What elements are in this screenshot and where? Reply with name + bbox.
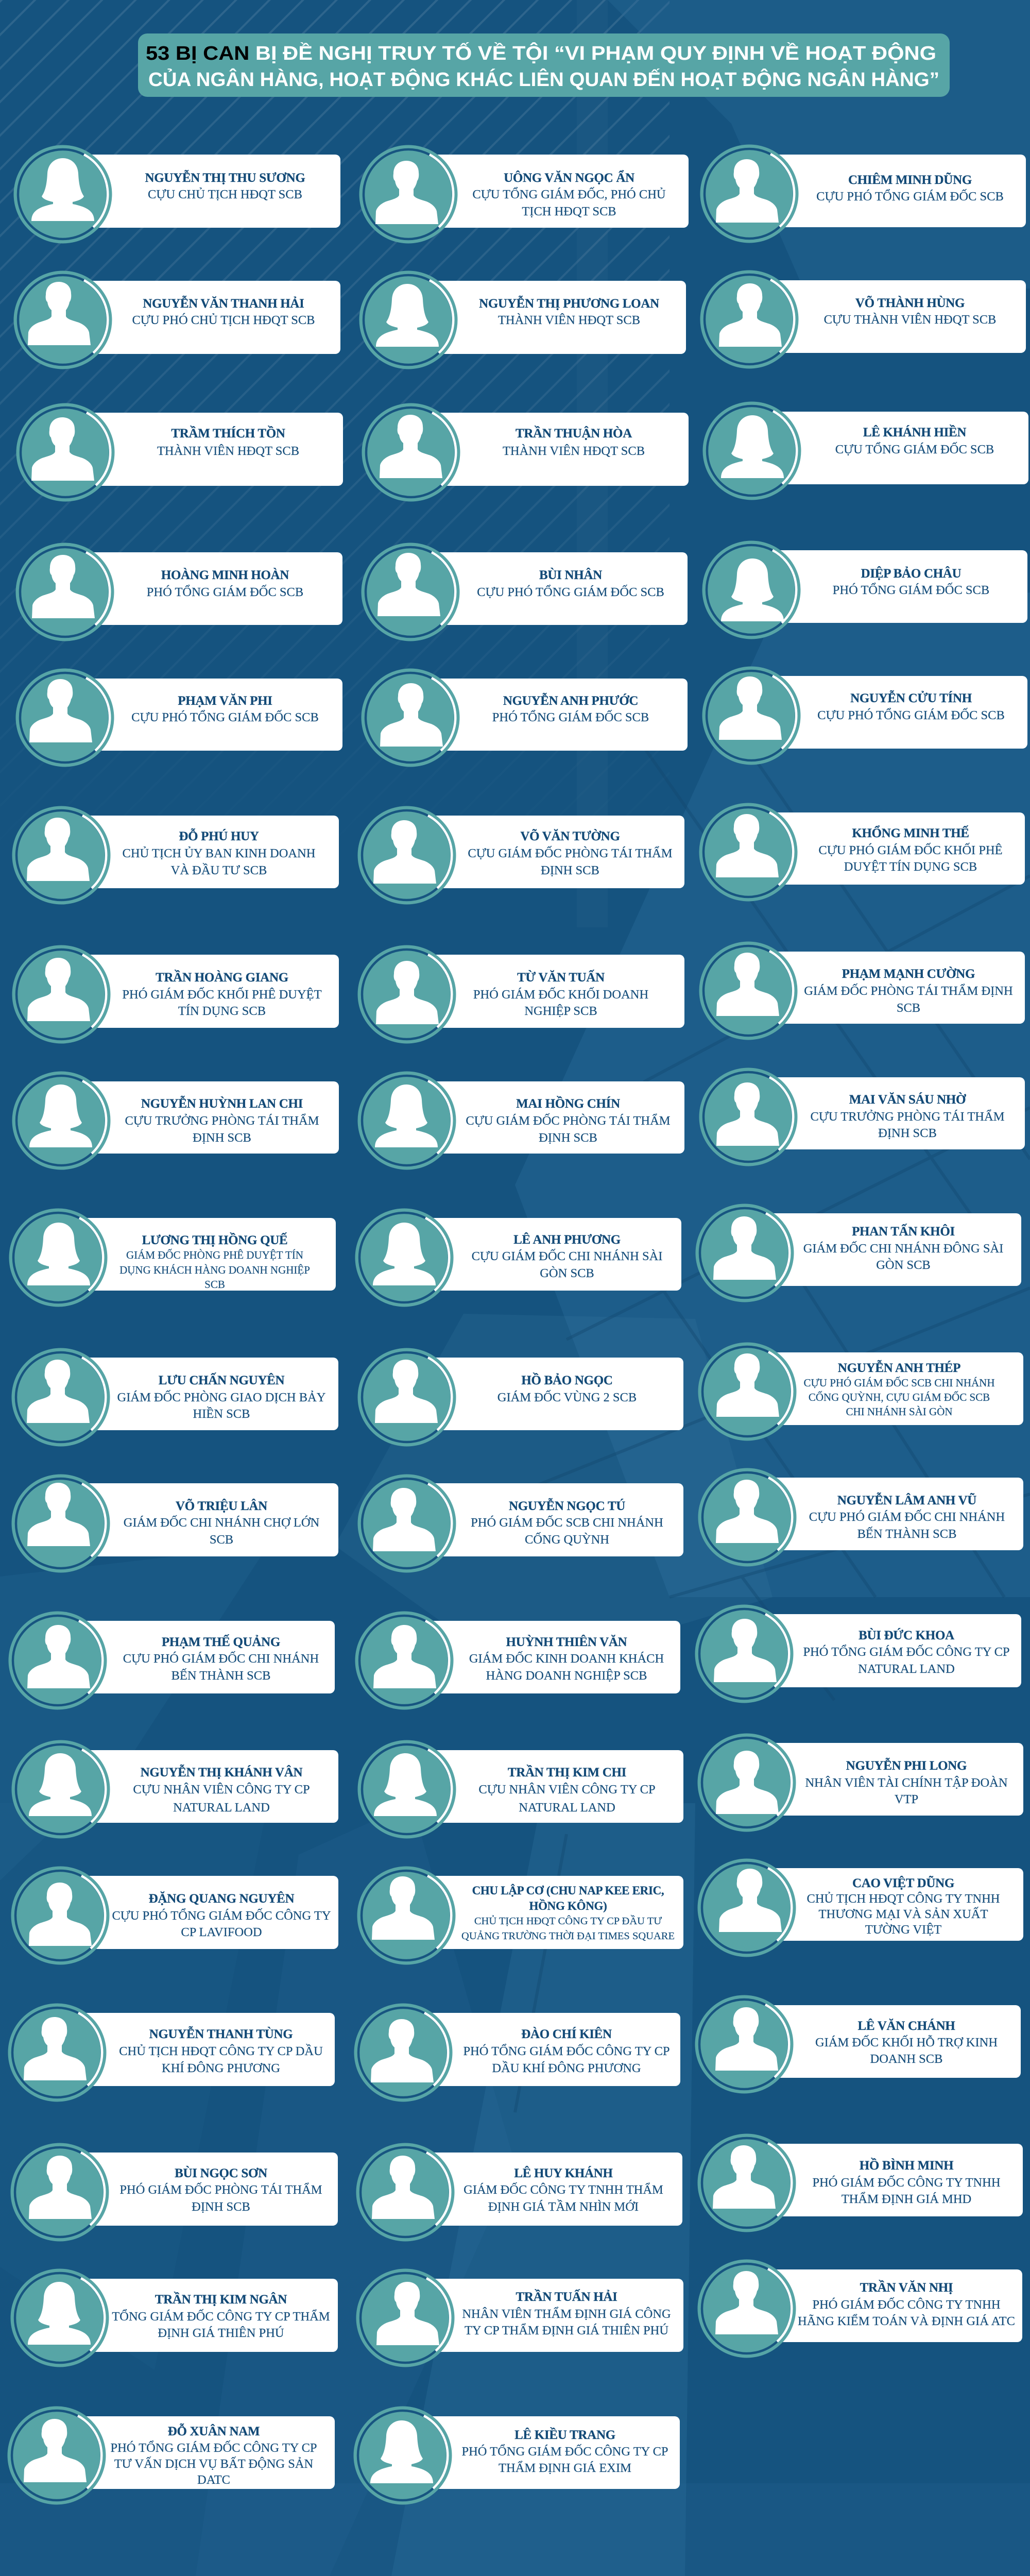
text: NGUYỄN THỊ KHÁNH VÂN xyxy=(141,1765,303,1780)
portrait xyxy=(698,1468,796,1566)
text: TY CP THẨM ĐỊNH GIÁ THIÊN PHÚ xyxy=(465,2323,668,2337)
text: DỤNG KHÁCH HÀNG DOANH NGHIỆP xyxy=(119,1264,310,1276)
text: SCB xyxy=(210,1533,233,1547)
card: Lê Kiều Trang xyxy=(353,2406,680,2505)
text: KHÍ ĐÔNG PHƯƠNG xyxy=(162,2061,280,2075)
card: Chu Lập Cơ xyxy=(357,1866,683,1965)
card: Võ Thành Hùng xyxy=(700,270,1026,369)
text: TRẦN HOÀNG GIANG xyxy=(156,970,288,985)
text: BÙI ĐỨC KHOA xyxy=(859,1628,954,1642)
portrait xyxy=(697,2260,796,2358)
portrait xyxy=(359,271,457,369)
title line 2: CỦA NGÂN HÀNG, HOẠT ĐỘNG KHÁC LIÊN QUAN ĐẾN HOẠT ĐỘNG NGÂN HÀNG” xyxy=(148,67,939,91)
portrait xyxy=(11,1348,110,1447)
card: Phạm Mạnh Cường xyxy=(699,942,1025,1040)
text: TRẦN TUẤN HẢI xyxy=(516,2289,617,2304)
text: ĐỊNH SCB xyxy=(192,2200,250,2214)
text: LÊ HUY KHÁNH xyxy=(514,2166,613,2180)
portrait xyxy=(356,2269,454,2367)
text: HIỀN SCB xyxy=(193,1406,250,1421)
text: TRẦN THUẬN HÒA xyxy=(516,426,632,440)
text: PHÓ TỔNG GIÁM ĐỐC CÔNG TY CP xyxy=(461,2444,668,2459)
card: Trần Hoàng Giang xyxy=(12,945,339,1044)
text: CỰU THÀNH VIÊN HĐQT SCB xyxy=(824,312,996,327)
text: THẨM ĐỊNH GIÁ MHD xyxy=(842,2191,971,2206)
card: Trầm Thích Tồn xyxy=(16,403,343,502)
text: DUYỆT TÍN DỤNG SCB xyxy=(844,859,977,874)
text: BẾN THÀNH SCB xyxy=(857,1526,956,1541)
text: GIÁM ĐỐC VÙNG 2 SCB xyxy=(497,1389,637,1404)
text: CỰU PHÓ TỔNG GIÁM ĐỐC CÔNG TY xyxy=(112,1908,331,1923)
text: CỰU PHÓ CHỦ TỊCH HĐQT SCB xyxy=(132,313,315,327)
card: Võ Văn Tường xyxy=(357,806,684,905)
text: THƯƠNG MẠI VÀ SẢN XUẤT xyxy=(819,1906,988,1921)
text: VÕ THÀNH HÙNG xyxy=(855,295,965,310)
card: Nguyễn Lâm Anh Vũ xyxy=(698,1468,1023,1566)
portrait xyxy=(354,2003,452,2102)
text: PHẠM MẠNH CƯỜNG xyxy=(842,967,975,981)
card: Lê Văn Chánh xyxy=(695,1995,1021,2094)
text: NGUYỄN THỊ THU SƯƠNG xyxy=(145,170,305,185)
text: PHÓ GIÁM ĐỐC CÔNG TY TNHH xyxy=(812,2297,1001,2312)
text: CỰU PHÓ GIÁM ĐỐC KHỐI PHÊ xyxy=(818,842,1003,857)
portrait xyxy=(16,403,114,502)
text: CỰU PHÓ GIÁM ĐỐC SCB CHI NHÁNH xyxy=(803,1377,995,1389)
portrait xyxy=(357,806,456,905)
card: Trần Thị Kim Ngân xyxy=(10,2269,338,2367)
text: LÊ KIỀU TRANG xyxy=(514,2427,615,2442)
portrait xyxy=(702,402,801,500)
portrait xyxy=(357,1475,456,1572)
text: THẨM ĐỊNH GIÁ EXIM xyxy=(499,2460,631,2475)
card: Nguyễn Văn Thanh Hải xyxy=(13,271,340,369)
portrait xyxy=(11,1866,109,1965)
text: CỐNG QUỲNH xyxy=(525,1532,609,1547)
portrait xyxy=(12,945,110,1044)
text: ĐỖ PHÚ HUY xyxy=(179,828,259,843)
text: GIÁM ĐỐC CHI NHÁNH ĐÔNG SÀI xyxy=(803,1241,1003,1256)
text: PHẠM VĂN PHI xyxy=(178,693,272,708)
text: ĐỖ XUÂN NAM xyxy=(168,2423,260,2438)
text: PHAN TẤN KHÔI xyxy=(852,1224,955,1239)
text: SCB xyxy=(897,1001,920,1015)
text: VÕ VĂN TƯỜNG xyxy=(520,828,620,843)
card: Trần Văn Nhị xyxy=(697,2260,1022,2358)
text: CỰU PHÓ TỔNG GIÁM ĐỐC SCB xyxy=(477,584,664,599)
card: Trần Thị Kim Chi xyxy=(357,1740,683,1838)
portrait xyxy=(695,1995,793,2094)
portrait xyxy=(11,1740,110,1838)
card: Nguyễn Thị Khánh Vân xyxy=(11,1740,338,1838)
text: PHÓ TỔNG GIÁM ĐỐC SCB xyxy=(833,582,989,597)
text: CỰU TỔNG GIÁM ĐỐC, PHÓ CHỦ xyxy=(472,187,666,201)
text: GIÁM ĐỐC KINH DOANH KHÁCH xyxy=(469,1651,664,1666)
text: HOÀNG MINH HOÀN xyxy=(161,568,289,582)
portrait xyxy=(357,1072,456,1170)
portrait xyxy=(699,1067,797,1166)
portrait xyxy=(695,1604,793,1703)
card: Mai Văn Sáu Nhờ xyxy=(699,1067,1025,1166)
text: ĐỊNH SCB xyxy=(193,1131,251,1145)
text: ĐẶNG QUANG NGUYÊN xyxy=(149,1891,294,1906)
text: NATURAL LAND xyxy=(858,1662,955,1676)
card: Lương Thị Hồng Quế xyxy=(9,1209,336,1307)
text: HUỲNH THIÊN VĂN xyxy=(506,1635,627,1649)
card: Cao Việt Dũng xyxy=(697,1859,1023,1957)
text: PHÓ TỔNG GIÁM ĐỐC CÔNG TY CP xyxy=(110,2440,317,2455)
card: Trần Tuấn Hải xyxy=(356,2269,683,2367)
portrait xyxy=(697,1859,796,1957)
text: MAI HỒNG CHÍN xyxy=(516,1096,620,1111)
text: THÀNH VIÊN HĐQT SCB xyxy=(157,444,299,458)
portrait xyxy=(11,1475,110,1572)
text: PHÓ TỔNG GIÁM ĐỐC SCB xyxy=(147,584,303,599)
card: Nguyễn Ngọc Tú xyxy=(357,1475,683,1572)
title line 1: 53 BỊ CAN BỊ ĐỀ NGHỊ TRUY TỐ VỀ TỘI “VI PHẠM QUY ĐỊNH VỀ HOẠT ĐỘNG xyxy=(146,41,936,64)
card: Đỗ Xuân Nam xyxy=(7,2406,335,2505)
text: HÀNG DOANH NGHIỆP SCB xyxy=(486,1668,647,1683)
text: DATC xyxy=(197,2473,230,2487)
text: UÔNG VĂN NGỌC ẨN xyxy=(504,170,634,185)
portrait xyxy=(12,806,110,905)
text: VTP xyxy=(895,1792,918,1806)
text: PHÓ GIÁM ĐỐC SCB CHI NHÁNH xyxy=(471,1515,663,1530)
portrait xyxy=(357,1348,456,1447)
card: Mai Hồng Chín xyxy=(357,1072,684,1170)
text: NGUYỄN PHI LONG xyxy=(846,1758,967,1773)
portrait xyxy=(357,1866,455,1965)
text: TƯ VẤN DỊCH VỤ BẤT ĐỘNG SẢN xyxy=(114,2456,314,2471)
portrait xyxy=(357,1740,456,1838)
card: Nguyễn Thanh Tùng xyxy=(8,2003,335,2102)
text: NGUYỄN NGỌC TÚ xyxy=(509,1498,625,1513)
portrait xyxy=(8,1612,107,1709)
text: DOANH SCB xyxy=(870,2052,942,2066)
text: ĐỊNH GIÁ THIÊN PHÚ xyxy=(158,2326,284,2340)
text: THÀNH VIÊN HĐQT SCB xyxy=(503,444,645,458)
card: Đỗ Phú Huy xyxy=(12,806,339,905)
text: GIÁM ĐỐC PHÒNG PHÊ DUYỆT TÍN xyxy=(126,1249,303,1261)
text: CỰU PHÓ TỔNG GIÁM ĐỐC SCB xyxy=(817,707,1005,722)
text: ĐỊNH SCB xyxy=(539,1131,597,1145)
text: NGUYỄN VĂN THANH HẢI xyxy=(143,296,304,311)
text: NHÂN VIÊN TÀI CHÍNH TẬP ĐOÀN xyxy=(805,1775,1008,1790)
text: NGUYỄN THANH TÙNG xyxy=(149,2026,293,2041)
portrait xyxy=(362,669,459,767)
text: CỰU PHÓ GIÁM ĐỐC CHI NHÁNH xyxy=(123,1651,319,1666)
text: TRẦN VĂN NHỊ xyxy=(860,2280,953,2295)
portrait xyxy=(699,803,797,902)
portrait xyxy=(9,1209,107,1307)
text: HÃNG KIỂM TOÁN VÀ ĐỊNH GIÁ ATC xyxy=(798,2313,1015,2328)
portrait xyxy=(355,1209,453,1307)
portrait xyxy=(362,403,460,502)
text: NGUYỄN THỊ PHƯƠNG LOAN xyxy=(479,296,659,311)
text: CP LAVIFOOD xyxy=(181,1925,262,1939)
text: SCB xyxy=(204,1278,225,1291)
card: Lê Anh Phương xyxy=(355,1209,681,1307)
portrait xyxy=(10,2143,109,2241)
text: TỔNG GIÁM ĐỐC CÔNG TY CP THẨM xyxy=(112,2309,330,2324)
text: CHỦ TỊCH ỦY BAN KINH DOANH xyxy=(123,846,315,860)
text: CỰU GIÁM ĐỐC PHÒNG TÁI THẨM xyxy=(466,1113,671,1128)
text: GIÁM ĐỐC PHÒNG TÁI THẨM ĐỊNH xyxy=(804,983,1013,998)
text: CỰU TỔNG GIÁM ĐỐC SCB xyxy=(835,442,994,456)
text: MAI VĂN SÁU NHỜ xyxy=(849,1092,966,1107)
text: CỰU GIÁM ĐỐC PHÒNG TÁI THẨM xyxy=(468,845,673,860)
text: CỰU TRƯỞNG PHÒNG TÁI THẨM xyxy=(125,1113,319,1128)
text: NATURAL LAND xyxy=(519,1801,615,1815)
text: ĐỊNH SCB xyxy=(541,863,599,877)
text: CỰU CHỦ TỊCH HĐQT SCB xyxy=(148,187,302,201)
card: Nguyễn Anh Phước xyxy=(362,669,688,767)
text: PHÓ GIÁM ĐỐC KHỐI PHÊ DUYỆT xyxy=(122,987,322,1002)
text: NGUYỄN HUỲNH LAN CHI xyxy=(141,1096,303,1111)
portrait xyxy=(698,1343,796,1440)
card: Lưu Chấn Nguyên xyxy=(11,1348,338,1447)
card: Khổng Minh Thế xyxy=(699,803,1025,902)
text: PHÓ GIÁM ĐỐC CÔNG TY TNHH xyxy=(812,2175,1001,2190)
portrait xyxy=(13,145,112,243)
text: QUẢNG TRƯỜNG THỜI ĐẠI TIMES SQUARE xyxy=(461,1929,675,1942)
text: CỰU PHÓ TỔNG GIÁM ĐỐC SCB xyxy=(816,189,1004,204)
card: Bùi Nhân xyxy=(362,543,688,641)
text: PHÓ GIÁM ĐỐC PHÒNG TÁI THẨM xyxy=(119,2182,322,2197)
text: CHIÊM MINH DŨNG xyxy=(848,172,972,187)
text: CỰU NHÂN VIÊN CÔNG TY CP xyxy=(133,1782,310,1797)
card: Lê Huy Khánh xyxy=(356,2143,682,2241)
card: Uông Văn Ngọc Ẩn xyxy=(359,145,689,243)
portrait xyxy=(8,2003,106,2102)
text: BÙI NGỌC SƠN xyxy=(175,2166,267,2180)
text: NGHIỆP SCB xyxy=(524,1004,597,1018)
card: Nguyễn Anh Thép xyxy=(698,1343,1023,1440)
portrait xyxy=(702,667,800,765)
text: CHỦ TỊCH HĐQT CÔNG TY CP ĐẦU TƯ xyxy=(474,1914,662,1927)
text: NGUYỄN ANH THÉP xyxy=(838,1360,960,1375)
card: Bùi Ngọc Sơn xyxy=(10,2143,338,2241)
text: PHÓ TỔNG GIÁM ĐỐC SCB xyxy=(492,709,649,724)
text: TRẦM THÍCH TỒN xyxy=(171,426,285,440)
text: CỐNG QUỲNH, CỰU GIÁM ĐỐC SCB xyxy=(809,1391,990,1403)
card: Hồ Bình Minh xyxy=(697,2134,1023,2232)
text: HỒNG KÔNG) xyxy=(529,1899,607,1912)
text: CỰU TRƯỞNG PHÒNG TÁI THẨM xyxy=(811,1109,1005,1124)
text: CỰU NHÂN VIÊN CÔNG TY CP xyxy=(478,1782,656,1797)
text: GIÁM ĐỐC KHỐI HỖ TRỢ KINH xyxy=(815,2034,998,2049)
text: NATURAL LAND xyxy=(173,1801,270,1815)
text: BẾN THÀNH SCB xyxy=(171,1668,270,1683)
text: VÀ ĐẦU TƯ SCB xyxy=(171,862,267,877)
text: NHÂN VIÊN THẨM ĐỊNH GIÁ CÔNG xyxy=(462,2306,671,2321)
text: DIỆP BẢO CHÂU xyxy=(861,566,962,581)
card: Diệp Bảo Châu xyxy=(702,541,1027,639)
card: Nguyễn Thị Phương Loan xyxy=(359,271,686,369)
text: BÙI NHÂN xyxy=(539,568,602,582)
title banner xyxy=(138,33,950,97)
text: LÊ VĂN CHÁNH xyxy=(857,2019,955,2033)
text: TRẦN THỊ KIM NGÂN xyxy=(155,2292,287,2307)
card: Nguyễn Phi Long xyxy=(697,1733,1023,1832)
text: NGUYỄN ANH PHƯỚC xyxy=(503,693,638,708)
portrait xyxy=(10,2269,109,2367)
card: Nguyễn Thị Thu Sương xyxy=(13,145,340,243)
text: CHU LẬP CƠ (CHU NAP KEE ERIC, xyxy=(472,1884,664,1897)
text: ĐỊNH GIÁ TẦM NHÌN MỚI xyxy=(488,2199,639,2214)
portrait xyxy=(7,2406,106,2505)
text: TỪ VĂN TUẤN xyxy=(517,970,605,985)
text: GÒN SCB xyxy=(876,1258,931,1272)
portrait xyxy=(356,2143,454,2241)
card: Lê Khánh Hiền xyxy=(702,402,1028,500)
text: GIÁM ĐỐC CHI NHÁNH CHỢ LỚN xyxy=(124,1515,320,1530)
text: CỰU PHÓ TỔNG GIÁM ĐỐC SCB xyxy=(131,709,319,724)
text: TƯỜNG VIỆT xyxy=(865,1922,941,1937)
portrait xyxy=(13,271,112,369)
portrait xyxy=(699,942,797,1040)
card: Nguyễn Huỳnh Lan Chi xyxy=(12,1072,339,1170)
text: PHÓ TỔNG GIÁM ĐỐC CÔNG TY CP xyxy=(803,1644,1010,1659)
text: GIÁM ĐỐC CÔNG TY TNHH THẨM xyxy=(464,2182,663,2197)
text: LƯU CHẤN NGUYÊN xyxy=(159,1372,285,1387)
portrait xyxy=(15,543,114,641)
text: CỰU PHÓ GIÁM ĐỐC CHI NHÁNH xyxy=(809,1509,1005,1524)
text: PHẠM THẾ QUẢNG xyxy=(162,1634,280,1649)
text: TRẦN THỊ KIM CHI xyxy=(508,1765,626,1780)
text: TỊCH HĐQT SCB xyxy=(522,205,616,218)
card: Hoàng Minh Hoàn xyxy=(15,543,342,641)
text: LÊ KHÁNH HIỀN xyxy=(863,425,966,439)
card: Nguyễn Cửu Tính xyxy=(702,667,1027,765)
text: NGUYỄN LÂM ANH VŨ xyxy=(837,1493,976,1507)
text: THÀNH VIÊN HĐQT SCB xyxy=(498,313,640,327)
card: Huỳnh Thiên Văn xyxy=(355,1612,680,1709)
text: ĐỊNH SCB xyxy=(878,1126,937,1140)
card: Phạm Văn Phi xyxy=(15,669,342,767)
text: HỒ BÌNH MINH xyxy=(860,2158,954,2173)
portrait xyxy=(359,145,457,243)
portrait xyxy=(702,541,800,639)
text: ĐÀO CHÍ KIÊN xyxy=(521,2027,612,2041)
card: Phan Tấn Khôi xyxy=(695,1204,1021,1302)
text: NGUYỄN CỬU TÍNH xyxy=(850,690,972,705)
text: VÕ TRIỆU LÂN xyxy=(176,1498,267,1513)
text: CHỦ TỊCH HĐQT CÔNG TY TNHH xyxy=(806,1891,1000,1906)
card: Đặng Quang Nguyên xyxy=(11,1866,338,1965)
text: PHÓ GIÁM ĐỐC KHỐI DOANH xyxy=(473,987,648,1002)
text: CHỦ TỊCH HĐQT CÔNG TY CP DẦU xyxy=(119,2043,323,2058)
text: PHÓ TỔNG GIÁM ĐỐC CÔNG TY CP xyxy=(463,2043,670,2058)
text: TÍN DỤNG SCB xyxy=(178,1004,266,1018)
text: CAO VIỆT DŨNG xyxy=(852,1875,954,1890)
card: Đào Chí Kiên xyxy=(354,2003,680,2102)
portrait xyxy=(362,543,459,641)
card: Hồ Bảo Ngọc xyxy=(357,1348,683,1447)
portrait xyxy=(12,1072,110,1170)
text: LÊ ANH PHƯƠNG xyxy=(513,1232,621,1247)
portrait xyxy=(355,1612,453,1709)
card: Phạm Thế Quảng xyxy=(8,1612,335,1709)
text: GÒN SCB xyxy=(540,1266,594,1280)
card: Bùi Đức Khoa xyxy=(695,1604,1021,1703)
portrait xyxy=(353,2406,452,2505)
portrait xyxy=(697,2134,796,2232)
portrait xyxy=(700,270,798,369)
portrait xyxy=(697,1733,796,1832)
portrait xyxy=(357,945,456,1044)
portrait xyxy=(695,1204,794,1302)
text: DẦU KHÍ ĐÔNG PHƯƠNG xyxy=(492,2060,641,2075)
card: Trần Thuận Hòa xyxy=(362,403,689,502)
portrait xyxy=(15,669,114,767)
text: HỒ BẢO NGỌC xyxy=(521,1372,613,1387)
text: KHỔNG MINH THẾ xyxy=(852,825,969,840)
card: Từ Văn Tuấn xyxy=(357,945,684,1044)
card: Võ Triệu Lân xyxy=(11,1475,338,1572)
card: Chiêm Minh Dũng xyxy=(700,144,1026,243)
portrait xyxy=(700,144,798,243)
text: LƯƠNG THỊ HỒNG QUẾ xyxy=(142,1232,287,1247)
text: GIÁM ĐỐC PHÒNG GIAO DỊCH BẢY xyxy=(117,1389,326,1404)
text: CHI NHÁNH SÀI GÒN xyxy=(846,1405,953,1418)
text: CỰU GIÁM ĐỐC CHI NHÁNH SÀI xyxy=(472,1248,662,1263)
